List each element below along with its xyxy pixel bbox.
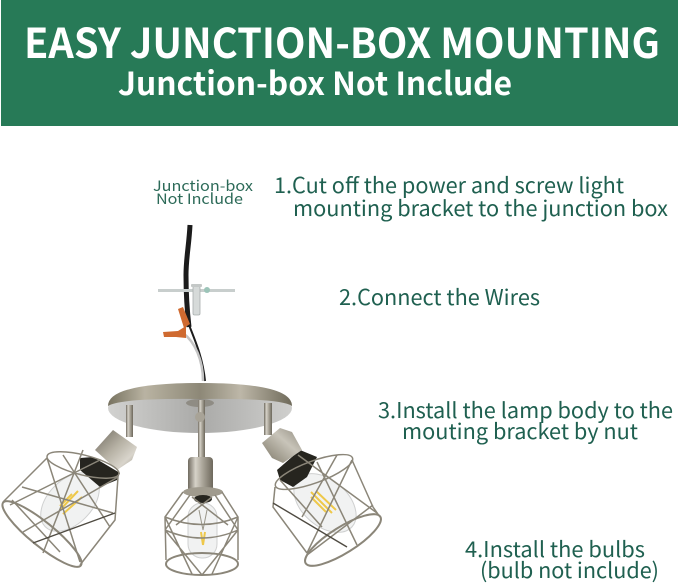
socket (80, 457, 120, 487)
bulb (30, 462, 110, 542)
step 3 (378, 394, 673, 446)
black cable (186, 225, 190, 327)
step 2: 2.Connect the Wires (339, 281, 540, 312)
wire cage (272, 448, 387, 574)
bracket bar (158, 289, 235, 292)
stem (198, 400, 205, 458)
socket (188, 457, 213, 492)
bulb (283, 462, 367, 544)
step 1: 1.Cut off the power and screw light (274, 169, 624, 200)
step 1 (274, 169, 668, 223)
wires and mounting bracket (158, 225, 235, 381)
middle lamp (165, 400, 238, 575)
label: junction-box not included: Not Include (156, 188, 243, 209)
wire nuts (178, 307, 190, 328)
step 3: mouting bracket by nut (402, 415, 638, 446)
wire cage (165, 492, 238, 575)
bulb (188, 503, 217, 558)
right lamp (262, 428, 387, 574)
wire cage (0, 446, 121, 575)
thin black wire (189, 325, 205, 381)
ceiling plate (108, 383, 292, 437)
label: junction-box not included: Junction-box (153, 175, 253, 196)
step 1: mounting bracket to the junction box (293, 192, 668, 223)
socket (277, 450, 317, 487)
label: junction-box not included (153, 175, 253, 209)
step 3: 3.Install the lamp body to the (378, 394, 673, 425)
left lamp (0, 430, 137, 575)
header banner (1, 0, 678, 126)
white wire (183, 333, 203, 381)
subtitle: Junction-box Not Include (118, 59, 512, 105)
step 4: 4.Install the bulbs (465, 533, 645, 564)
title: EASY JUNCTION-BOX MOUNTING (24, 10, 660, 70)
bracket screw (193, 286, 200, 315)
step 4 (465, 533, 659, 584)
